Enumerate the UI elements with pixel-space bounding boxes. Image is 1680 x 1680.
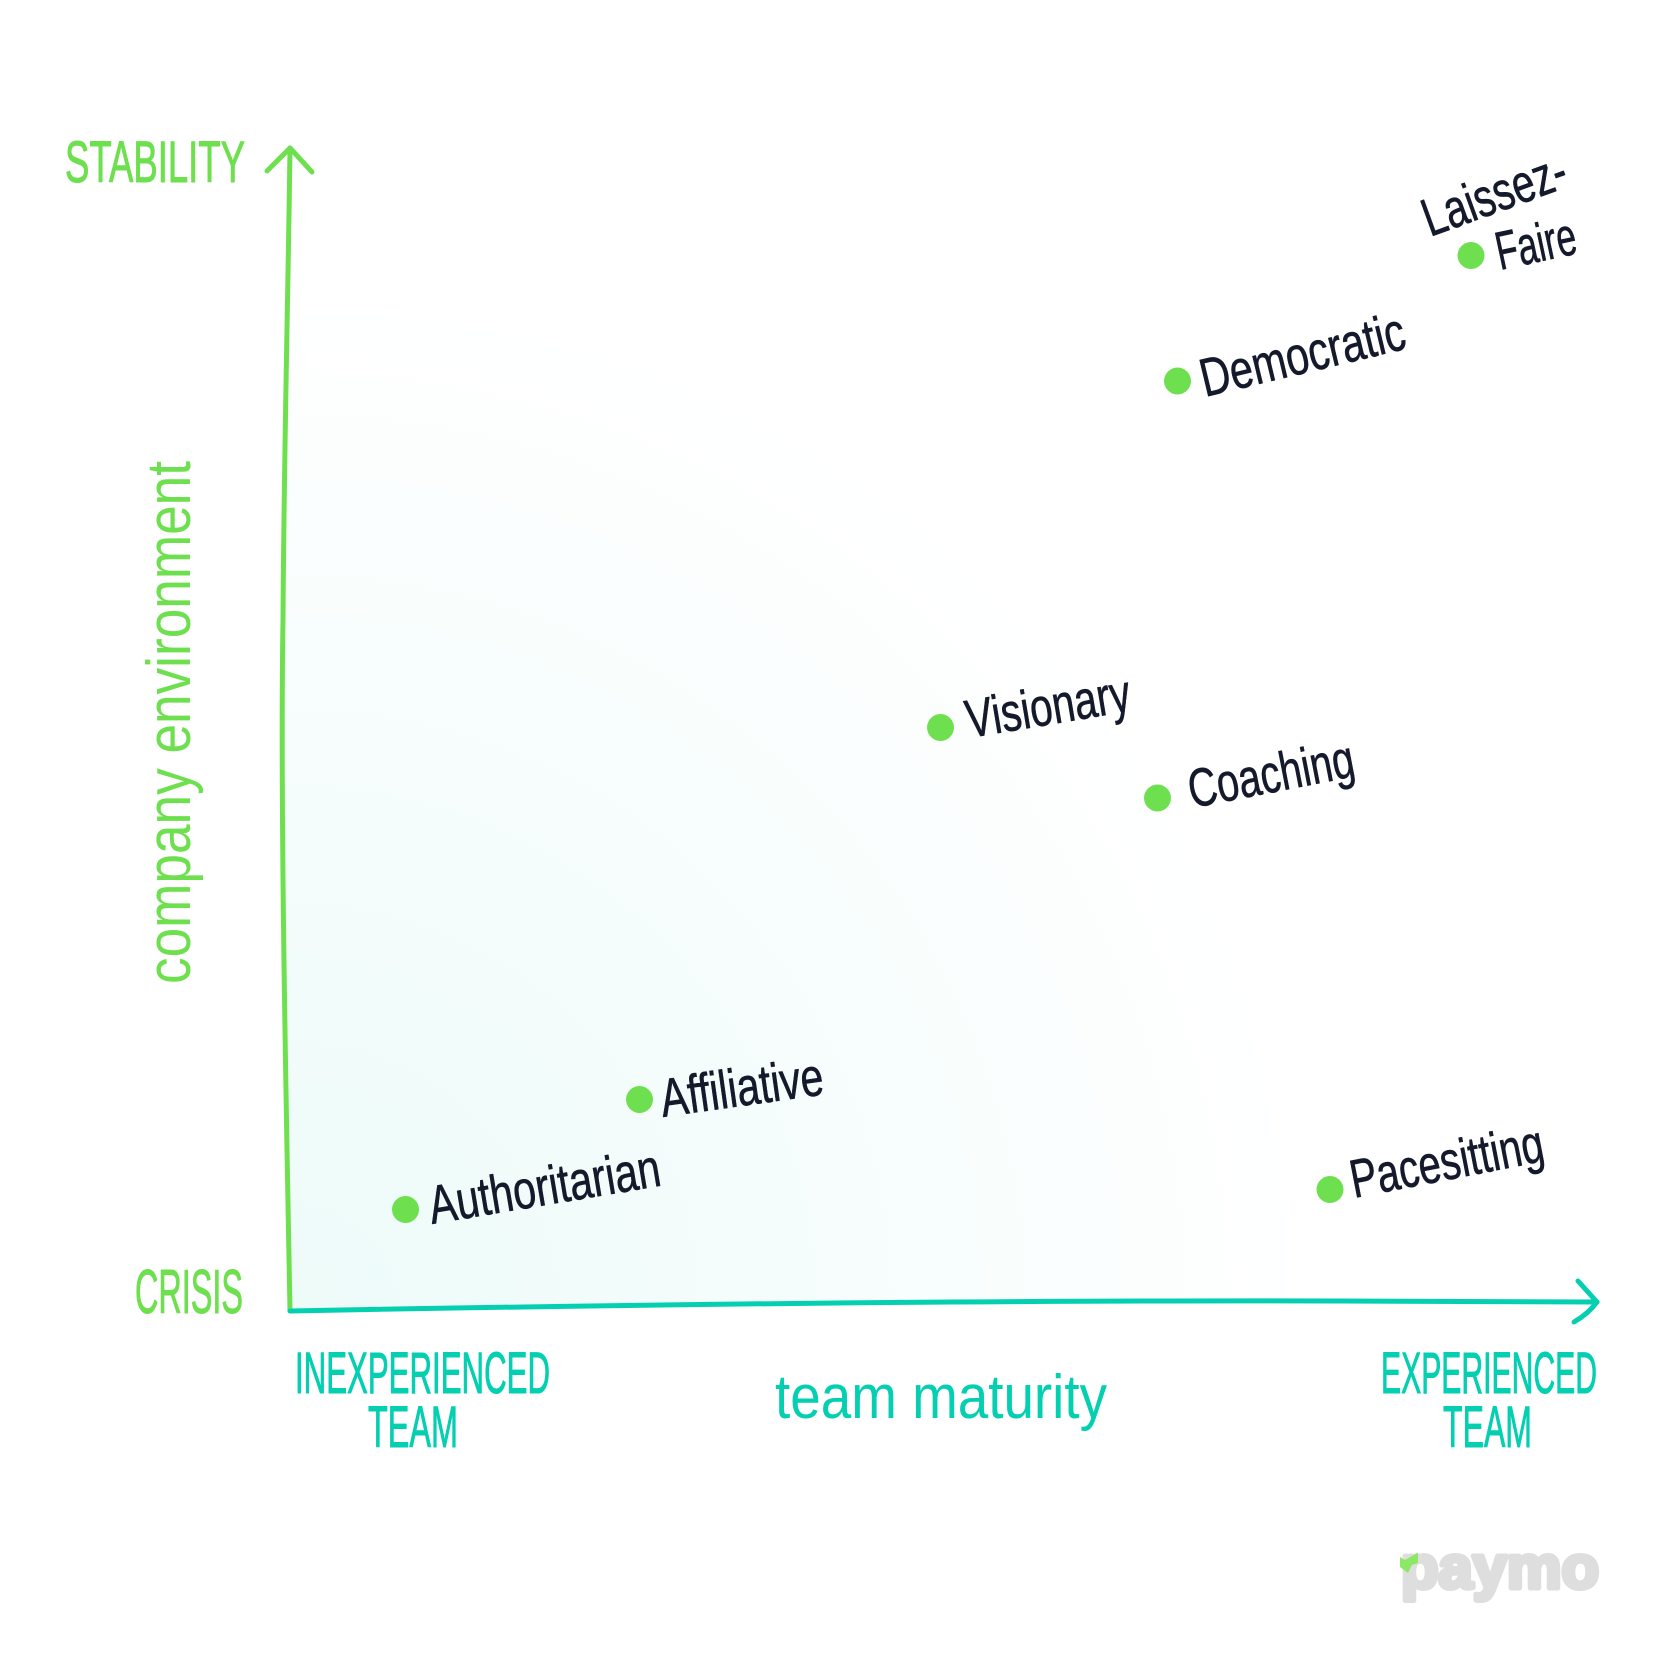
gradient chart area	[282, 148, 1597, 1311]
x axis left label: INEXPERIENCED	[295, 1341, 550, 1406]
x axis left label	[295, 1341, 550, 1460]
x axis title: team maturity	[775, 1363, 1107, 1432]
y axis top label: stability: STABILITY	[65, 130, 245, 195]
point: Laissez-Faire	[1414, 141, 1582, 282]
point: Visionary	[927, 663, 1135, 750]
point: Authoritarian	[392, 1138, 665, 1236]
point: Affiliative	[626, 1047, 827, 1129]
point: Visionary: Visionary	[961, 663, 1135, 750]
logo: paymo: paymo	[1401, 1534, 1599, 1601]
point: Democratic	[1164, 302, 1411, 409]
y axis bottom label: crisis: CRISIS	[135, 1258, 243, 1327]
x axis arrow	[290, 1281, 1597, 1322]
point: Coaching: Coaching	[1183, 729, 1359, 820]
point: Affiliative: Affiliative	[656, 1047, 827, 1129]
y axis arrow	[267, 148, 312, 1311]
point: Coaching	[1144, 729, 1359, 820]
y axis title: company environment	[135, 461, 204, 984]
point: Laissez-Faire: Laissez-	[1414, 141, 1575, 248]
point: Pacesitting: Pacesitting	[1345, 1113, 1549, 1210]
point: Laissez-Faire: Faire	[1490, 206, 1582, 282]
x axis right label	[1381, 1341, 1597, 1460]
point: Pacesitting	[1316, 1113, 1549, 1210]
point: Democratic: Democratic	[1194, 302, 1411, 409]
point: Authoritarian: Authoritarian	[424, 1138, 665, 1236]
x axis right label: TEAM	[1443, 1395, 1532, 1460]
x axis left label: TEAM	[368, 1395, 458, 1460]
